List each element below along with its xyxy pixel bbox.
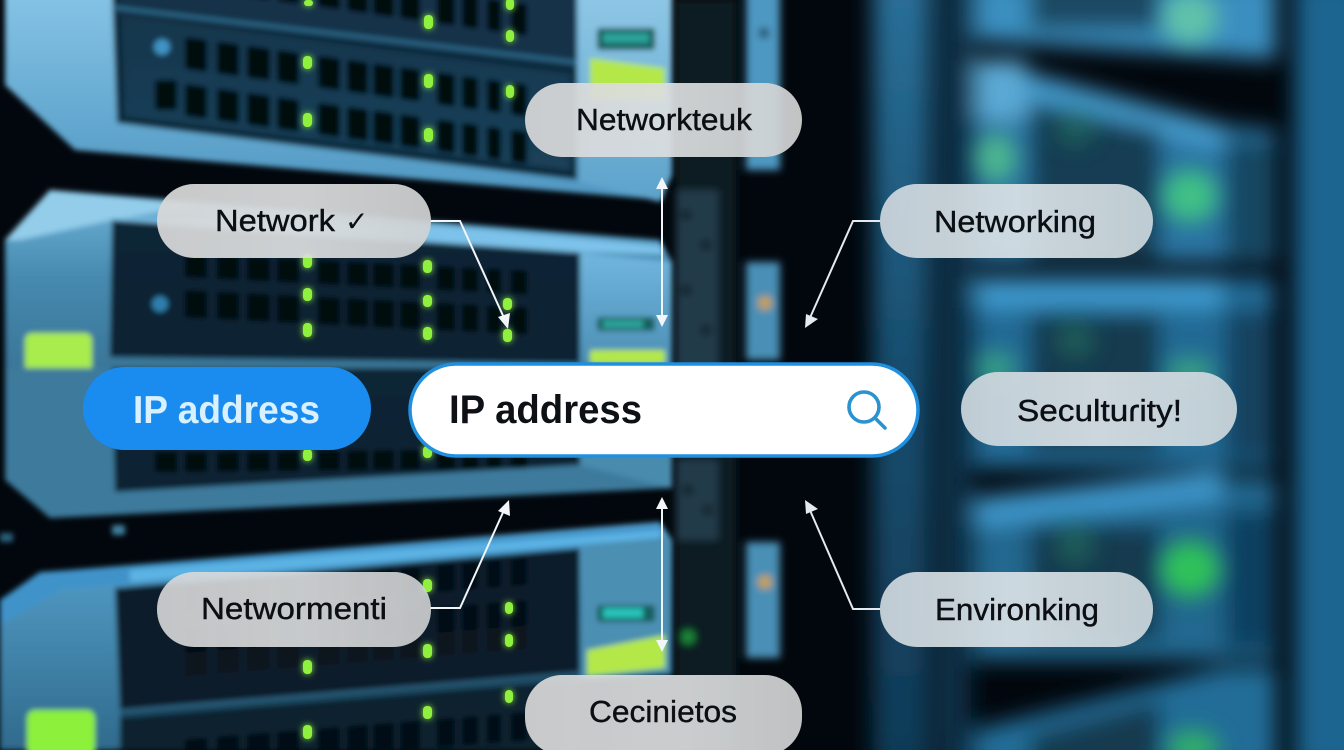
unit 1 bbox=[974, 58, 1276, 262]
arrow: Networking to search bbox=[805, 221, 880, 328]
pill: Cecinietos: Cecinietos bbox=[589, 694, 737, 729]
arrow: Networment to search bbox=[430, 500, 510, 608]
arrow: top vertical bbox=[656, 177, 668, 327]
pill: Network bbox=[157, 184, 431, 258]
arrow: Network to search bbox=[430, 221, 510, 329]
server 2 bbox=[5, 190, 672, 368]
server 3 bbox=[5, 368, 672, 518]
right blurred server racks bbox=[873, 0, 1344, 750]
pill: Networmenti: Networmenti bbox=[201, 591, 387, 626]
pill: Networking: Networking bbox=[934, 204, 1096, 239]
pill: Network: ✓ bbox=[345, 206, 368, 237]
unit 0 bbox=[974, 0, 1276, 60]
pill: Networking bbox=[880, 184, 1153, 258]
arrow: Environking to search bbox=[805, 500, 880, 609]
pill: Networkteuk: Networkteuk bbox=[576, 102, 752, 137]
arrow: bottom vertical bbox=[656, 497, 668, 652]
pill: Network: Network bbox=[215, 203, 336, 238]
pill: IP address blue bbox=[83, 367, 371, 450]
pill: Environking bbox=[880, 572, 1153, 647]
search text: IP address bbox=[449, 388, 642, 432]
right blurred green lights bbox=[976, 0, 1220, 750]
pill: IP address blue: IP address bbox=[133, 389, 320, 432]
server 1 bbox=[5, 0, 672, 200]
pill: Networkteuk bbox=[525, 83, 802, 157]
left server rack units bbox=[0, 0, 672, 750]
search bar bbox=[410, 364, 918, 456]
pill: Networmenti bbox=[157, 572, 431, 647]
icon: magnifier bbox=[849, 392, 885, 428]
centre rack posts bbox=[676, 0, 780, 750]
unit 3 bbox=[974, 478, 1276, 660]
server 4 bbox=[0, 522, 672, 750]
unit 2 bbox=[974, 278, 1274, 468]
pill: Cecinietos bbox=[525, 675, 802, 750]
pill: Security: Secultuɾity! bbox=[1017, 393, 1182, 428]
pill: Security bbox=[961, 372, 1237, 446]
unit 4 bbox=[974, 668, 1276, 750]
pill: Environking: Environking bbox=[935, 592, 1099, 627]
rack LEDs bbox=[303, 0, 514, 739]
